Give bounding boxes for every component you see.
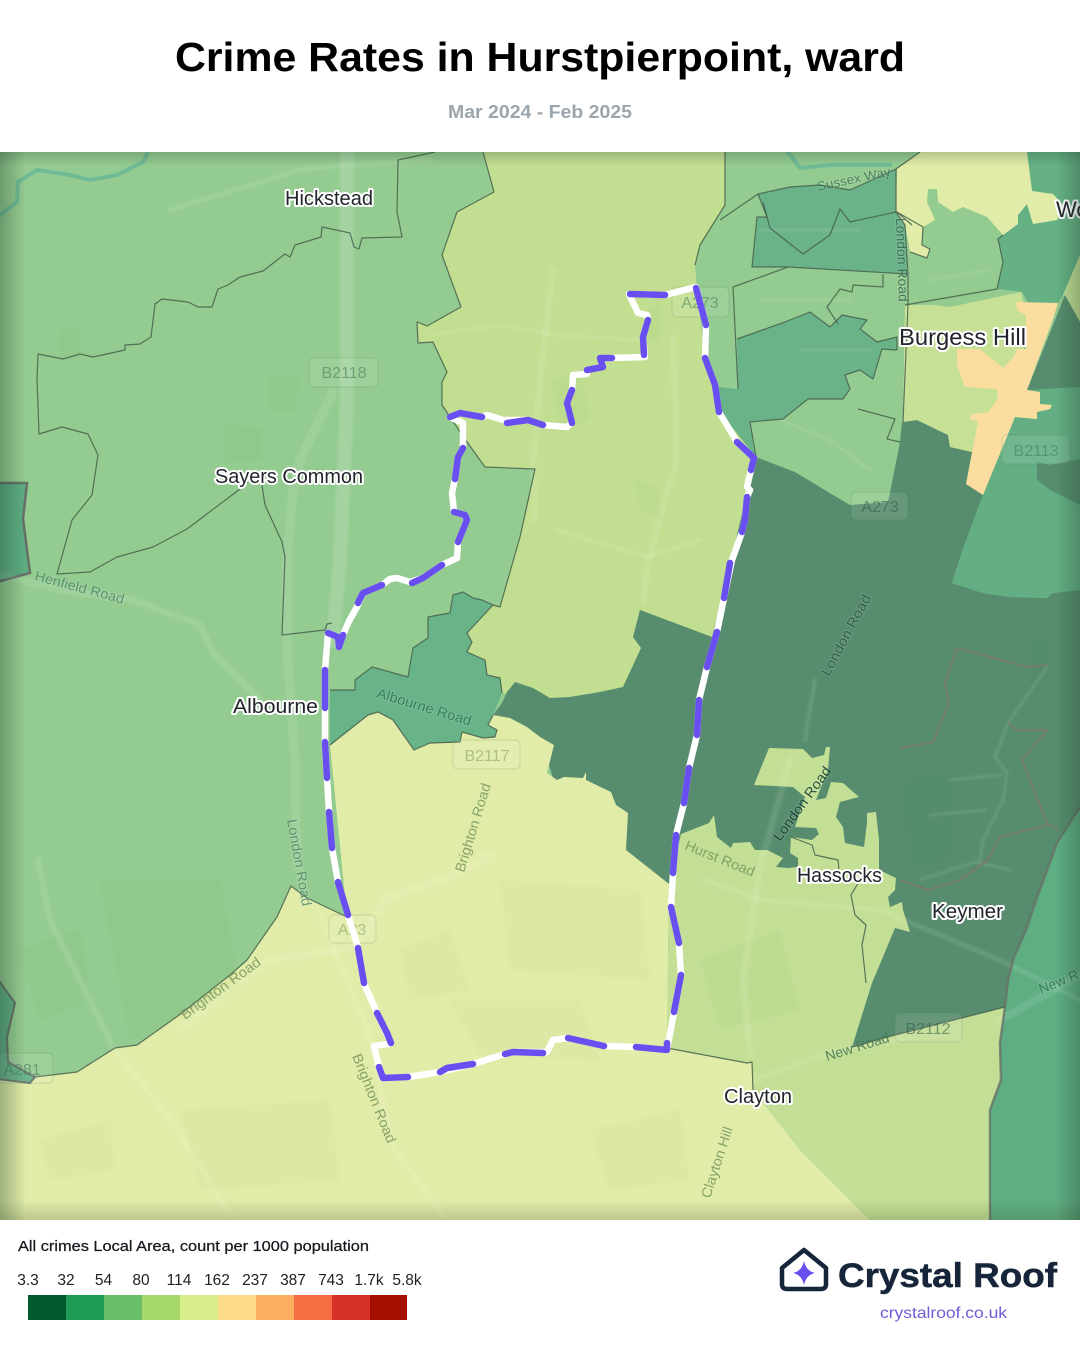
map region: Burgess Hill centre xyxy=(903,292,1030,452)
map region: Burgess Hill south west xyxy=(718,312,897,457)
website url: crystalroof.co.uk xyxy=(880,1305,1008,1322)
road name labels: Sussex Way xyxy=(816,164,892,194)
map region: south west corner xyxy=(0,978,35,1083)
ward outline white base xyxy=(325,287,754,1078)
road name labels: London Road xyxy=(818,591,874,678)
legend scale labels: 387 xyxy=(280,1272,306,1289)
road shields xyxy=(0,287,1070,1083)
legend scale labels: 54 xyxy=(95,1272,112,1289)
map region: south yellow xyxy=(0,712,870,1220)
map region: north east pale xyxy=(896,152,1063,258)
road name labels: New R xyxy=(1036,966,1080,997)
place labels: Hickstead xyxy=(285,188,373,210)
shield: A273 south xyxy=(851,492,908,520)
road name labels: Clayton Hill xyxy=(698,1125,736,1200)
map region: dark triangle xyxy=(1027,295,1080,390)
legend scale labels: 743 xyxy=(318,1272,344,1289)
place labels xyxy=(215,188,1080,1108)
road name labels: New Road xyxy=(823,1029,891,1064)
wordmark: Crystal Roof xyxy=(838,1257,1058,1295)
map region: dark high-crime band xyxy=(493,420,1080,1060)
shield: B2113: B2113 xyxy=(1013,443,1059,460)
legend title: All crimes Local Area, count per 1000 population xyxy=(18,1239,369,1255)
shield: B2112 xyxy=(895,1013,962,1042)
shield: A281 xyxy=(0,1053,53,1083)
map region: Albourne Road xyxy=(330,592,502,750)
logo: Crystal Roof xyxy=(782,1250,1058,1322)
place labels: Burgess Hill xyxy=(899,324,1026,350)
map region: east edge strip xyxy=(990,807,1080,1220)
map region: dark patch east xyxy=(1037,459,1080,505)
map region: north centre xyxy=(417,152,756,698)
legend colour bar xyxy=(28,1295,407,1320)
map region: east of Burgess Hill xyxy=(952,385,1080,598)
shield: B2118: B2118 xyxy=(321,365,367,382)
legend scale labels xyxy=(17,1272,422,1289)
shield: B2117: B2117 xyxy=(464,748,510,765)
road name labels: Henfield Road xyxy=(33,567,126,607)
road name labels: Brighton Road xyxy=(349,1051,400,1145)
place labels: Keymer xyxy=(932,901,1003,923)
boundary lines xyxy=(35,152,1080,1220)
road name labels: Brighton Road xyxy=(177,954,264,1022)
map region: western rural base xyxy=(0,152,1080,1220)
ward boundary: Hurstpierpoint xyxy=(325,287,754,1078)
legend scale labels: 3.3 xyxy=(17,1272,39,1289)
shield: B2118 xyxy=(309,358,378,387)
map region: right edge pale sliver xyxy=(1063,255,1080,322)
ward outline purple dashes xyxy=(325,288,754,1078)
map region: highest-crime orange area xyxy=(957,302,1058,495)
shield: A273 north: A273 xyxy=(681,295,719,312)
shield: B2112: B2112 xyxy=(905,1021,951,1038)
road name labels: London Road xyxy=(893,218,911,302)
shield: A23: A23 xyxy=(338,922,366,939)
place labels: Hassocks xyxy=(797,865,882,887)
legend scale labels: 32 xyxy=(57,1272,75,1289)
map region: Burgess Hill north west xyxy=(752,169,908,274)
icon: house with star xyxy=(782,1250,826,1289)
road name labels xyxy=(33,164,1080,1200)
subtitle: date range: Mar 2024 - Feb 2025 xyxy=(448,101,632,122)
shield: B2113 xyxy=(1002,435,1070,464)
legend scale labels: 1.7k xyxy=(354,1272,384,1289)
legend xyxy=(17,1239,422,1320)
map region: far north east xyxy=(997,152,1080,309)
place labels: Sayers Common xyxy=(215,466,363,488)
road name labels: Hurst Road xyxy=(683,837,757,880)
place labels: Albourne xyxy=(233,696,318,718)
choropleth map xyxy=(0,152,1080,1220)
legend scale labels: 114 xyxy=(167,1272,192,1289)
place labels: Clayton xyxy=(724,1086,792,1108)
map region: west edge block xyxy=(0,483,30,582)
shield: B2117 xyxy=(453,740,520,769)
rivers xyxy=(0,152,890,215)
roads xyxy=(0,152,1080,1220)
road name labels: London Road xyxy=(769,763,834,844)
road name labels: Brighton Road xyxy=(452,781,494,874)
field patches xyxy=(20,300,1050,1190)
legend scale labels: 237 xyxy=(242,1272,268,1289)
title: Crime Rates in Hurstpierpoint, ward xyxy=(175,34,905,80)
shield: A281: A281 xyxy=(3,1062,41,1079)
shield: A273 south: A273 xyxy=(861,499,899,516)
legend scale labels: 5.8k xyxy=(392,1272,422,1289)
legend scale labels: 80 xyxy=(132,1272,150,1289)
shield: A23 xyxy=(329,915,376,943)
road name labels: Albourne Road xyxy=(375,685,474,729)
road name labels: London Road xyxy=(284,818,315,907)
shield: A273 north xyxy=(672,287,729,317)
map edge shading xyxy=(0,152,1080,1220)
map region: arc south of Burgess Hill xyxy=(752,442,900,505)
map region: Hassocks south east xyxy=(667,747,1005,1220)
legend scale labels: 162 xyxy=(204,1272,230,1289)
